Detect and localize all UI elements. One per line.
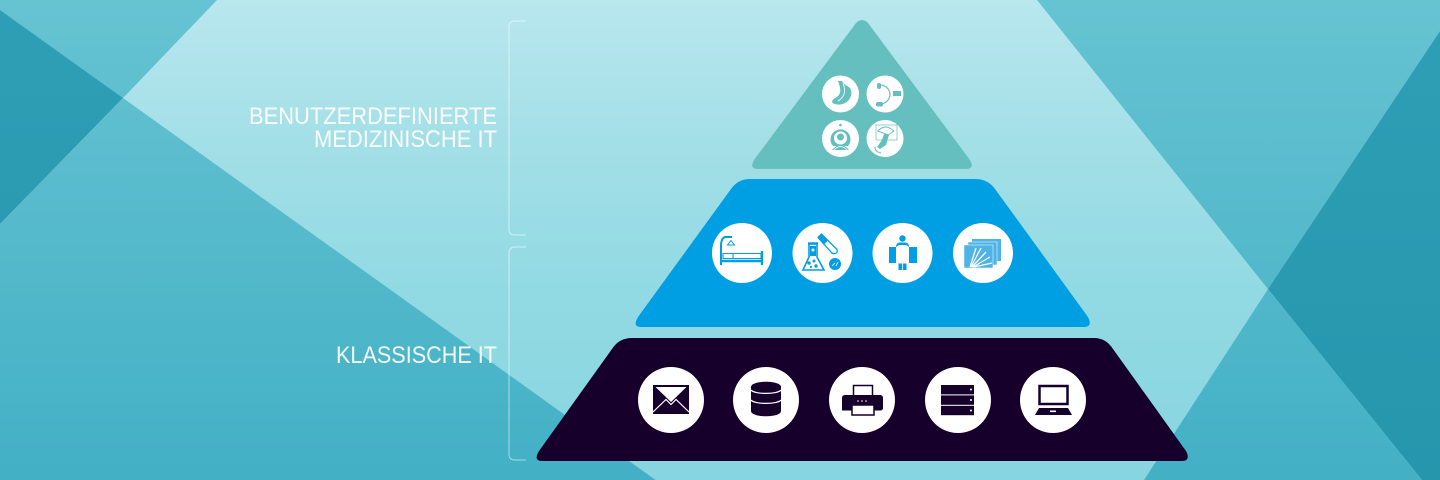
icon: envelope: [638, 367, 704, 433]
heading: Klassische IT: KLASSISCHE IT: [336, 342, 497, 369]
bracket: upper group: [509, 21, 526, 235]
heading: Benutzerdefinierte medizinische IT: [249, 103, 497, 153]
icon: stomach: [822, 76, 859, 112]
heading: Benutzerdefinierte medizinische IT: MEDIZINISCHE IT: [314, 126, 497, 153]
icon: person with X-ray plates: [872, 223, 932, 283]
icon: laboratory flask: [792, 223, 852, 283]
icon: hospital bed: [712, 223, 772, 283]
pyramid tier: clinical IT: [636, 179, 1090, 327]
heading: Benutzerdefinierte medizinische IT: BENUTZERDEFINIERTE: [249, 103, 497, 130]
pyramid tier: custom medical IT: [752, 20, 972, 169]
icon: MRI scanner: [822, 120, 859, 157]
icon: laptop: [1020, 367, 1086, 433]
icon: server rack: [925, 367, 991, 433]
icon: printer: [829, 367, 895, 433]
icon: database: [733, 367, 799, 433]
icon: X-ray sheets: [953, 223, 1013, 283]
icon: arc device: [866, 76, 904, 112]
bracket: lower group: [509, 247, 526, 460]
icon: ultrasound: [866, 120, 904, 157]
pyramid tier: classic IT: [537, 338, 1188, 461]
